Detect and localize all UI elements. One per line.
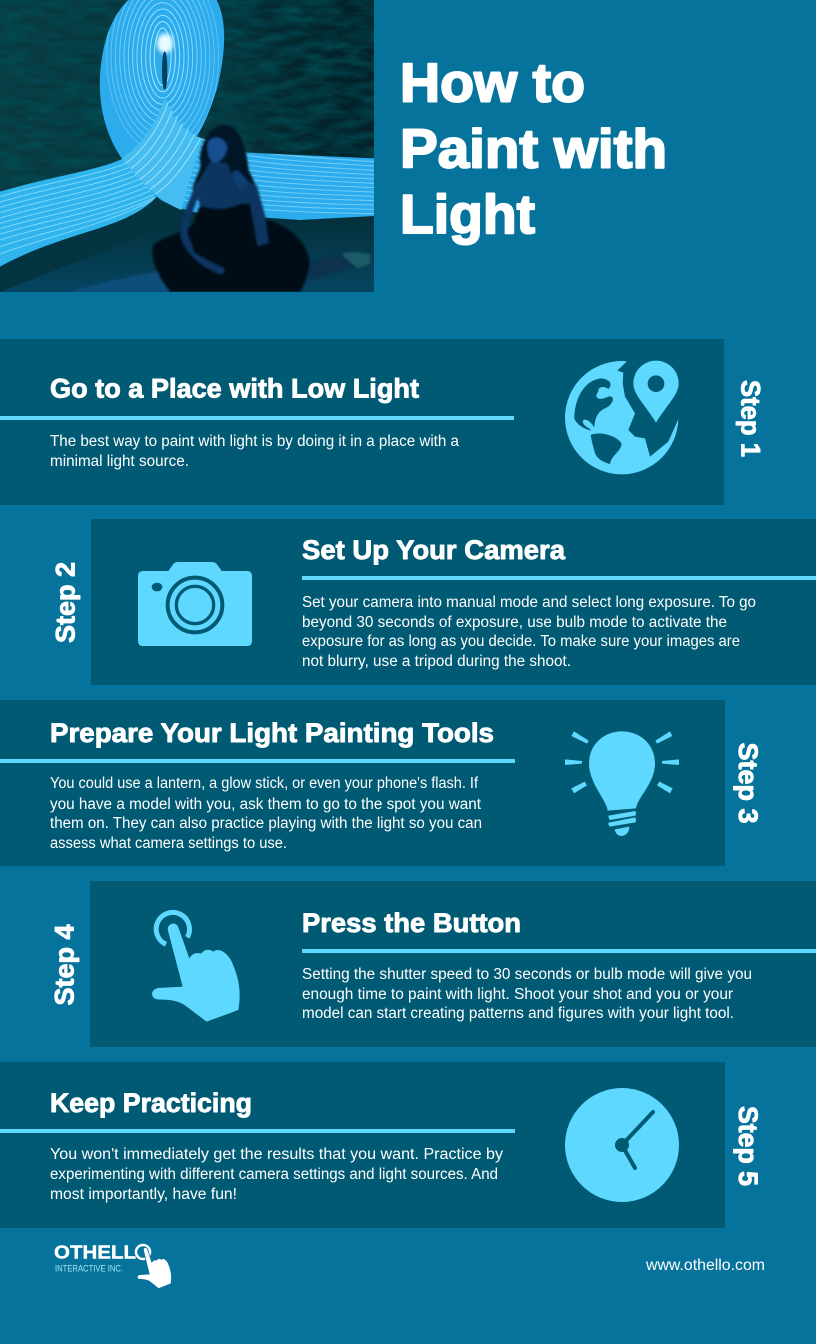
- logo: Othello Interactive: INTERACTIVE INC.: [55, 1264, 123, 1274]
- icon: globe with pin: [565, 357, 683, 474]
- panel: step 3: [0, 700, 725, 866]
- icon: pointing hand: [152, 912, 240, 1022]
- title: Paint with: [400, 118, 667, 180]
- photo: light painting with model: [0, 0, 374, 292]
- text: step 5: [50, 1146, 503, 1203]
- text: step 5: experimenting with different camera settings and light sources. And: [50, 1166, 498, 1183]
- text: step 4: [302, 966, 752, 1022]
- heading: step 3: Prepare Your Light Painting Tools: [50, 718, 494, 748]
- text: step 1: [50, 433, 459, 470]
- website url: www.othello.com: [645, 1257, 765, 1274]
- text: step 1: The best way to paint with light is by doing it in a place with a: [50, 433, 459, 450]
- title: Light: [400, 183, 535, 245]
- panel: step 4: [90, 881, 816, 1047]
- logo: Othello Interactive: [54, 1242, 172, 1289]
- label: step 5: Step 5: [733, 1106, 763, 1186]
- title: How to: [400, 52, 585, 114]
- title: [400, 52, 667, 245]
- text: step 2: not blurry, use a tripod during the shoot.: [302, 653, 571, 670]
- text: step 3: you have a model with you, ask them to go to the spot you want: [50, 796, 482, 813]
- panel: step 1: [0, 339, 724, 505]
- model: [70, 125, 371, 292]
- text: step 2: [302, 594, 756, 670]
- text: step 2: Set your camera into manual mode and select long exposure. To go: [302, 594, 756, 611]
- text: step 2: beyond 30 seconds of exposure, use bulb mode to activate the: [302, 614, 727, 631]
- text: step 4: enough time to paint with light. Shoot your shot and you or your: [302, 986, 733, 1003]
- label: step 1: Step 1: [736, 380, 766, 457]
- icon: clock: [565, 1088, 679, 1202]
- icon: camera: [138, 562, 252, 646]
- heading: step 1: Go to a Place with Low Light: [50, 374, 419, 404]
- icon: light bulb: [565, 731, 679, 836]
- panel: step 2: [91, 519, 816, 685]
- loop band: [100, 0, 374, 220]
- text: step 3: them on. They can also practice playing with the light so you can: [50, 815, 482, 832]
- logo: Othello Interactive: OTHELL: [54, 1242, 136, 1262]
- text: step 4: model can start creating patterns and figures with your light tool.: [302, 1005, 734, 1022]
- label: step 4: Step 4: [49, 924, 79, 1006]
- label: step 2: Step 2: [50, 562, 80, 643]
- text: step 3: [50, 775, 482, 852]
- left band: [0, 158, 157, 267]
- panel: step 5: [0, 1062, 725, 1228]
- text: step 4: Setting the shutter speed to 30 seconds or bulb mode will give you: [302, 966, 752, 983]
- text: step 5: You won't immediately get the results that you want. Practice by: [50, 1146, 503, 1163]
- text: step 1: minimal light source.: [50, 453, 189, 470]
- text: step 3: assess what camera settings to use.: [50, 835, 287, 852]
- label: step 3: Step 3: [733, 742, 763, 824]
- text: step 5: most importantly, have fun!: [50, 1186, 237, 1203]
- text: step 2: exposure for as long as you decide. To make sure your images are: [302, 633, 740, 650]
- heading: step 5: Keep Practicing: [50, 1088, 252, 1118]
- heading: step 4: Press the Button: [302, 908, 521, 938]
- text: step 3: You could use a lantern, a glow stick, or even your phone's flash. If: [50, 775, 479, 792]
- heading: step 2: Set Up Your Camera: [302, 535, 566, 565]
